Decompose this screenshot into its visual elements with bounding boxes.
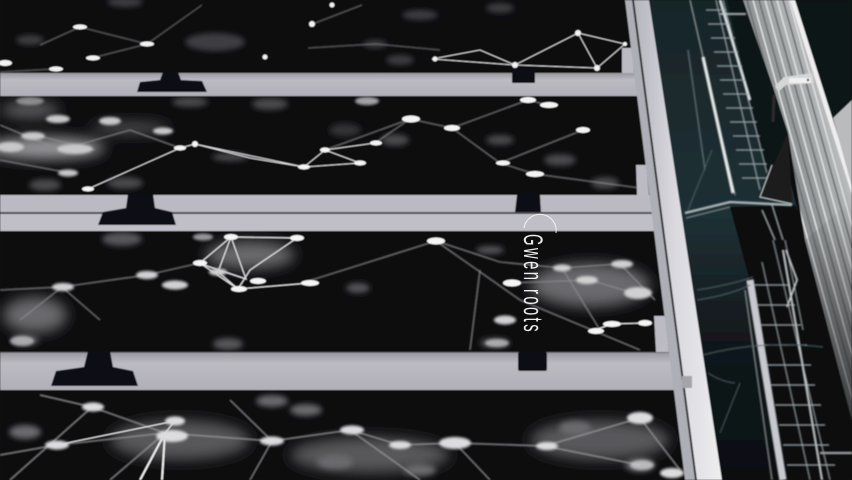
handwritten label: Gwen roots — [518, 234, 549, 334]
rail: middle pair — [0, 195, 662, 231]
dark bracket under main beam — [760, 132, 792, 204]
clip: row 3 left — [51, 351, 138, 386]
main ribbed cable tray — [742, 0, 852, 420]
rail: lower — [0, 352, 682, 390]
clip: row 2 left — [98, 194, 176, 225]
mounting clips — [51, 70, 547, 386]
junction box on tray — [773, 73, 814, 122]
lower cable ladder — [697, 240, 852, 480]
clip: row 2 right — [515, 188, 541, 212]
handwritten label — [518, 214, 556, 334]
panel: solar panel row 3 — [0, 231, 668, 352]
panel: solar panel row 1 — [0, 0, 634, 73]
rail: upper — [0, 73, 645, 96]
panel: solar panel row 4 — [0, 390, 690, 480]
vertical aluminium frame — [625, 0, 722, 480]
clip: row 1 right — [512, 70, 535, 83]
frame rails between panels — [0, 48, 682, 390]
panel side frame tabs — [622, 48, 669, 352]
panel: solar panel row 2 — [0, 96, 650, 195]
upper cable ladder — [685, 0, 792, 240]
clip: row 1 left — [137, 72, 207, 92]
clip: row 3 right — [518, 352, 547, 371]
